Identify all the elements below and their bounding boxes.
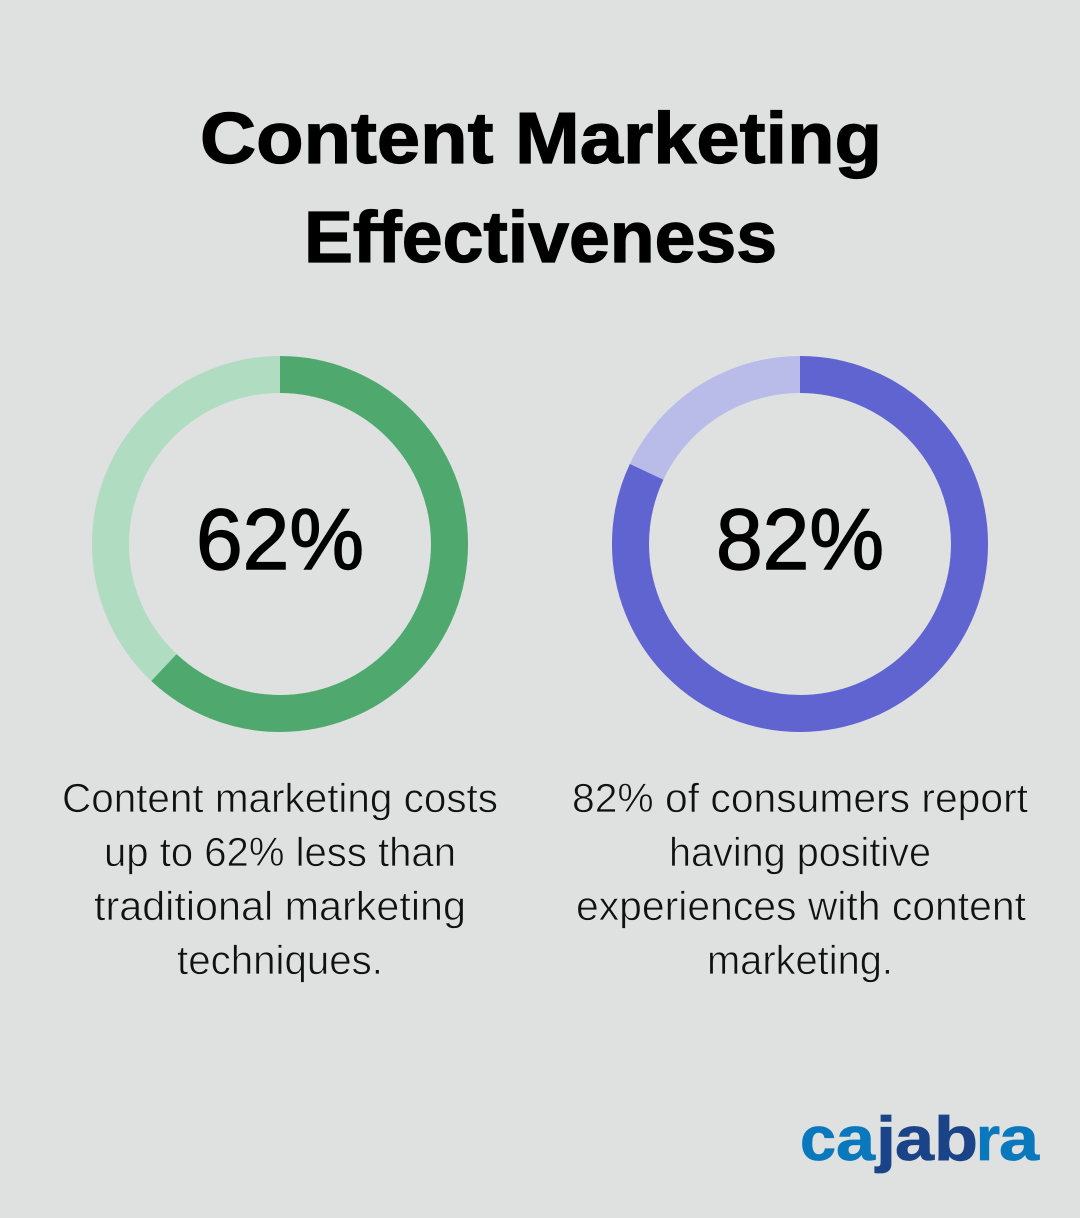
- panel: 62% cost statistic: [62, 374, 498, 983]
- description: consumer experiences: experiences with content: [576, 883, 1027, 929]
- description: content marketing costs: techniques.: [177, 937, 383, 983]
- description: consumer experiences: 82% of consumers report: [572, 775, 1029, 821]
- logo: cajabra: a: [999, 1105, 1040, 1174]
- title: Effectiveness: [304, 198, 777, 278]
- description: consumer experiences: [572, 775, 1029, 983]
- logo: cajabra: c: [800, 1105, 836, 1174]
- panel: 82% consumer statistic: [572, 374, 1029, 983]
- description: consumer experiences: having positive: [669, 829, 931, 875]
- description: consumer experiences: marketing.: [707, 937, 893, 983]
- value: 82%: 82%: [716, 492, 884, 588]
- title: [200, 99, 882, 278]
- logo: cajabra: r: [976, 1105, 1000, 1174]
- title: Content Marketing: [200, 99, 882, 179]
- logo: cajabra: [800, 1105, 1040, 1174]
- value: 62%: 62%: [196, 492, 364, 588]
- logo: cajabra: a: [836, 1105, 876, 1174]
- logo: cajabra: a: [895, 1105, 935, 1174]
- description: content marketing costs: traditional marketing: [94, 883, 466, 929]
- description: content marketing costs: up to 62% less than: [104, 829, 456, 875]
- logo: cajabra: b: [934, 1105, 978, 1174]
- donut chart: 82%: [630, 374, 970, 714]
- logo: cajabra: j: [875, 1105, 896, 1174]
- donut chart: 62%: [110, 374, 450, 714]
- description: content marketing costs: [62, 775, 498, 983]
- description: content marketing costs: Content marketing costs: [62, 775, 498, 821]
